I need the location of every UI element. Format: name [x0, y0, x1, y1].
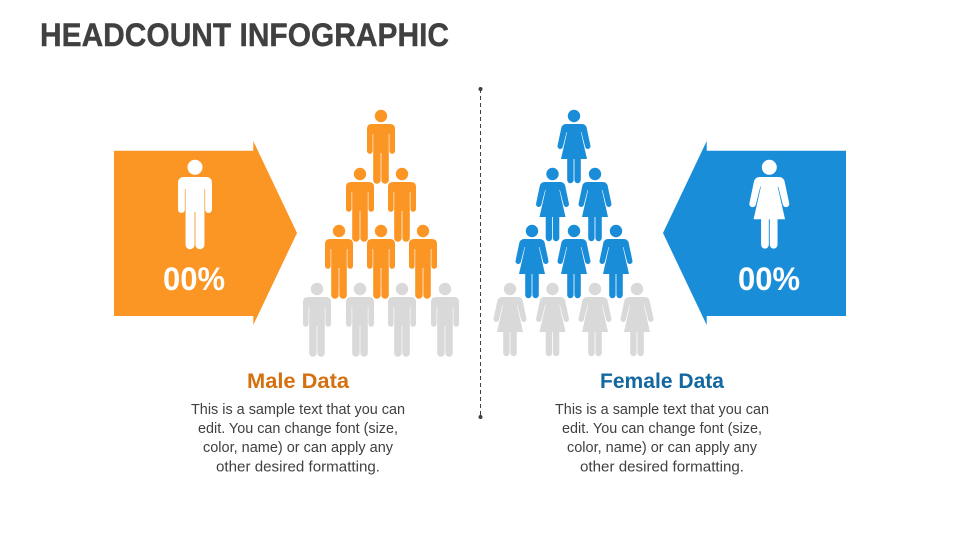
chart: female headcount pyramid — [493, 110, 654, 356]
chart: male headcount pyramid — [303, 110, 459, 357]
male percentage: 00% — [163, 261, 225, 297]
icon: female figure white — [749, 160, 789, 249]
arrow shape: male — [114, 141, 297, 325]
body text: female: edit. You can change font (size, — [562, 420, 762, 437]
body text: female: color, name) or can apply any — [567, 439, 757, 456]
panel: female arrow — [663, 141, 846, 325]
text block: male data — [191, 370, 405, 476]
icon: male figure white — [178, 160, 212, 249]
body text: female — [555, 401, 769, 476]
body text: female: This is a sample text that you can — [555, 401, 769, 418]
body text: female: other desired formatting. — [580, 458, 744, 476]
female percentage: 00% — [738, 261, 800, 297]
body text: male: other desired formatting. — [216, 458, 380, 476]
body text: male: This is a sample text that you can — [191, 401, 405, 418]
panel: male arrow — [114, 141, 297, 325]
center divider — [478, 87, 482, 419]
body text: male: color, name) or can apply any — [203, 439, 393, 456]
body text: male — [191, 401, 405, 476]
body text: male: edit. You can change font (size, — [198, 420, 398, 437]
female row 4 grey — [493, 283, 654, 356]
heading: male data: Male Data — [247, 370, 349, 393]
male rows 1 to 3 orange — [325, 110, 437, 299]
female rows 1 to 3 blue — [515, 110, 633, 298]
male row 4 grey — [303, 283, 459, 357]
text block: female data — [555, 370, 769, 476]
title: HEADCOUNT INFOGRAPHIC — [40, 17, 449, 53]
heading: female data: Female Data — [600, 370, 724, 393]
arrow shape: female — [663, 141, 846, 325]
